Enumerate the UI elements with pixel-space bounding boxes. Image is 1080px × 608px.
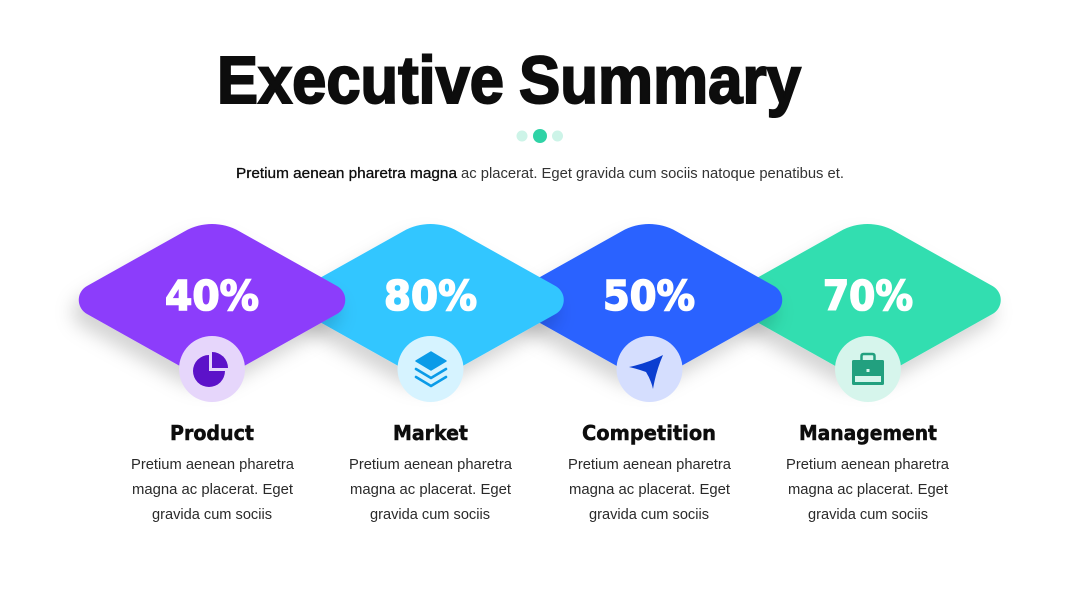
column: competition: Pretium aenean pharetra [568, 457, 732, 473]
panel: competition diamond [516, 224, 782, 376]
panel: market diamond [297, 224, 564, 376]
column: market: Pretium aenean pharetra [349, 457, 513, 473]
column: market: magna ac placerat. Eget [350, 482, 511, 498]
icon: pie chart [179, 336, 245, 402]
icon: paper plane [616, 336, 682, 402]
column: competition [568, 421, 732, 523]
column: market: Market [393, 421, 468, 445]
percent: 70%: 70% [823, 272, 913, 320]
title: Summary [519, 43, 801, 118]
subtitle [236, 165, 844, 182]
percent: 40%: 40% [165, 272, 259, 320]
column: management [786, 421, 950, 523]
title [217, 43, 801, 118]
column: market: gravida cum sociis [370, 507, 490, 523]
panel: management diamond [734, 224, 1001, 376]
column: competition: gravida cum sociis [589, 507, 709, 523]
column: product: Product [170, 421, 254, 445]
subtitle: ac placerat. Eget gravida cum sociis natoque penatibus et. [461, 165, 844, 182]
column: management: gravida cum sociis [808, 507, 928, 523]
column: product [131, 421, 295, 523]
column: market [349, 421, 513, 523]
column: competition: magna ac placerat. Eget [569, 482, 730, 498]
decorative dots [516, 129, 563, 143]
percent: 50%: 50% [603, 272, 695, 320]
percent: 80%: 80% [384, 272, 477, 320]
panel: product diamond [79, 224, 345, 376]
column: product: magna ac placerat. Eget [132, 482, 293, 498]
subtitle: Pretium aenean pharetra magna [236, 165, 458, 182]
column: management: Management [799, 421, 937, 445]
icon: briefcase [835, 336, 901, 402]
title: Executive [217, 43, 504, 118]
column: product: gravida cum sociis [152, 507, 272, 523]
column: management: Pretium aenean pharetra [786, 457, 950, 473]
column: product: Pretium aenean pharetra [131, 457, 295, 473]
icon: layers [398, 336, 464, 402]
column: management: magna ac placerat. Eget [788, 482, 948, 498]
column: competition: Competition [582, 421, 716, 445]
